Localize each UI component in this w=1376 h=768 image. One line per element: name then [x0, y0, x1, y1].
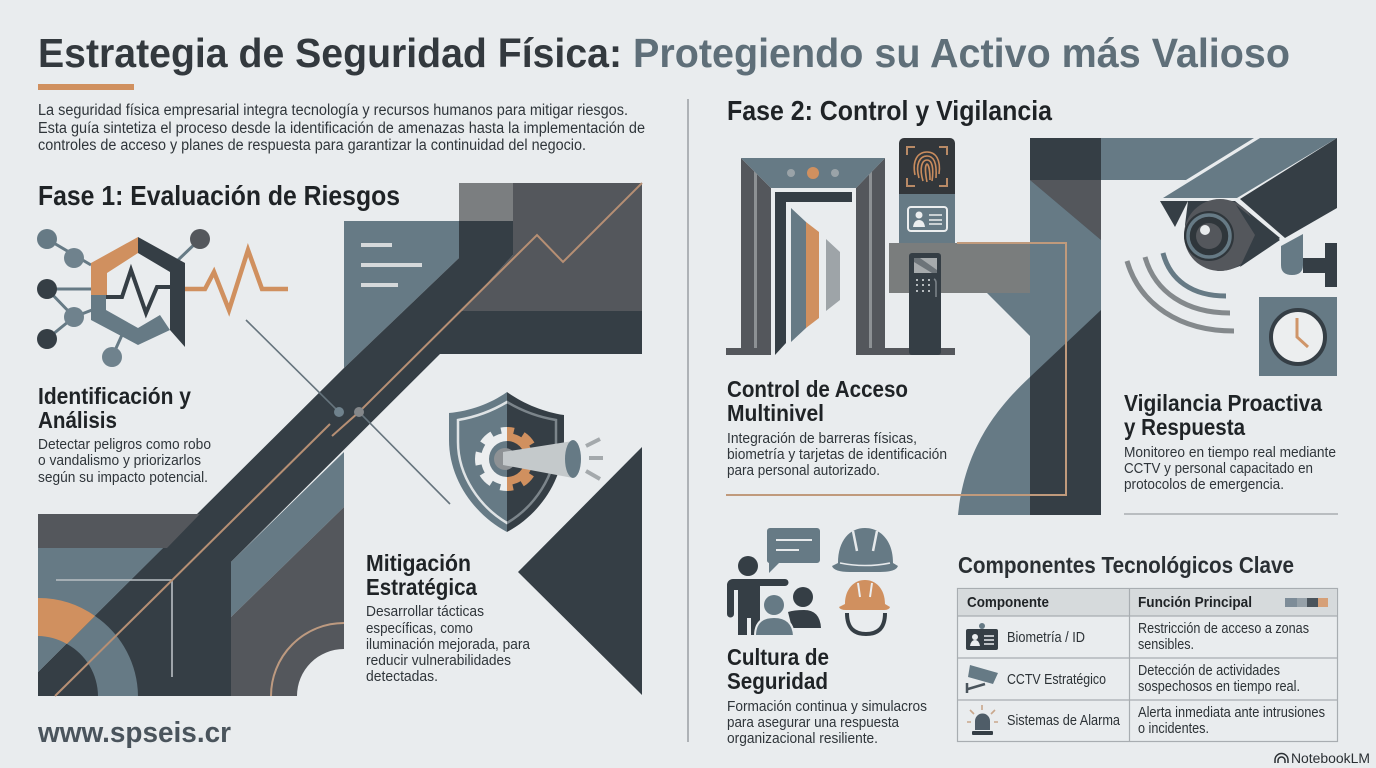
notebooklm watermark: NotebookLM — [1291, 751, 1370, 766]
text block: control de acceso: para personal autorizado. — [727, 462, 880, 479]
text block: cultura de seguridad — [727, 644, 927, 747]
text block: vigilancia proactiva: Vigilancia Proactiva — [1124, 390, 1322, 416]
title: Protegiendo su Activo más Valioso — [633, 30, 1290, 76]
text block: cultura de seguridad: para asegurar una respuesta — [727, 714, 900, 731]
table header — [967, 594, 1328, 611]
icon: shield with gear and megaphone — [449, 392, 603, 532]
text block: control de acceso: Control de Acceso — [727, 376, 908, 402]
table row: biometría: Biometría / ID — [1007, 630, 1085, 646]
text block: cultura de seguridad: organizacional resiliente. — [727, 730, 878, 747]
text block: control de acceso: Multinivel — [727, 400, 824, 426]
table: componentes tecnológicos — [958, 588, 1338, 742]
table row: cctv: sospechosos en tiempo real. — [1138, 679, 1300, 695]
table row: alarma: o incidentes. — [1138, 721, 1209, 737]
text block: identificación y análisis: o vandalismo y priorizarlos — [38, 452, 201, 469]
text block: identificación y análisis — [38, 383, 211, 486]
text block: mitigación estratégica: Estratégica — [366, 574, 477, 600]
text block: control de acceso: Integración de barreras físicas, — [727, 430, 917, 447]
intro text: Esta guía sintetiza el proceso desde la identificación de amenazas hasta la implementación de — [38, 120, 645, 137]
table header: Componente — [967, 594, 1049, 611]
table row: alarma — [1007, 705, 1325, 737]
icon: slate hard hat — [832, 528, 898, 572]
icon: biometric badge — [966, 623, 998, 650]
icon: orange hard hat — [839, 580, 890, 634]
icon: clock — [1259, 297, 1337, 376]
heading: fase 1: Fase 1: Evaluación de Riesgos — [38, 180, 400, 211]
text block: mitigación estratégica: Mitigación — [366, 550, 471, 576]
panel: abstract risk diagram — [38, 183, 642, 696]
table row: cctv: Detección de actividades — [1138, 663, 1280, 679]
icon: risk analysis hexagon network — [37, 229, 288, 367]
icon: security gate — [726, 158, 955, 355]
text block: vigilancia proactiva: y Respuesta — [1124, 414, 1245, 440]
icon: access kiosk — [909, 253, 941, 355]
text block: mitigación estratégica: Desarrollar tácticas — [366, 603, 484, 620]
text block: cultura de seguridad: Seguridad — [727, 668, 828, 694]
table row: cctv: CCTV Estratégico — [1007, 672, 1106, 688]
title — [38, 30, 1290, 76]
intro text — [38, 102, 645, 154]
table row: cctv — [1007, 663, 1300, 695]
text block: mitigación estratégica: reducir vulnerabilidades — [366, 652, 511, 669]
table row: alarma: Sistemas de Alarma — [1007, 713, 1121, 729]
icon: cctv camera — [1160, 138, 1337, 287]
text block: vigilancia proactiva: Monitoreo en tiempo real mediante — [1124, 444, 1336, 461]
panel: abstract architecture backdrop — [726, 138, 1254, 515]
table row: biometría — [1007, 621, 1309, 653]
text block: control de acceso — [727, 376, 947, 479]
icon: signal waves — [1127, 253, 1234, 331]
heading: componentes: Componentes Tecnológicos Clave — [958, 552, 1294, 578]
text block: identificación y análisis: Identificación y — [38, 383, 191, 409]
text block: cultura de seguridad: Cultura de — [727, 644, 829, 670]
icon: alarm beacon — [967, 705, 998, 735]
icon: id card — [899, 194, 955, 243]
text block: vigilancia proactiva — [1124, 390, 1336, 493]
table row: alarma: Alerta inmediata ante intrusiones — [1138, 705, 1325, 721]
text block: mitigación estratégica: iluminación mejorada, para — [366, 636, 531, 653]
table row: biometría: Restricción de acceso a zonas — [1138, 621, 1309, 637]
icon: fingerprint scanner — [899, 138, 955, 194]
text block: control de acceso: biometría y tarjetas de identificación — [727, 446, 947, 463]
intro text: La seguridad física empresarial integra tecnología y recursos humanos para mitigar riesgos. — [38, 102, 628, 119]
text block: vigilancia proactiva: CCTV y personal capacitado en — [1124, 460, 1313, 477]
heading: fase 2: Fase 2: Control y Vigilancia — [727, 95, 1052, 126]
icon: training group — [727, 528, 821, 636]
text block: identificación y análisis: según su impacto potencial. — [38, 469, 208, 486]
text block: mitigación estratégica: específicas, como — [366, 620, 473, 637]
text block: cultura de seguridad: Formación continua y simulacros — [727, 698, 927, 715]
website url: www.spseis.cr — [37, 717, 231, 749]
table row: biometría: sensibles. — [1138, 637, 1194, 653]
table header: Función Principal — [1138, 594, 1252, 611]
text block: vigilancia proactiva: protocolos de emergencia. — [1124, 476, 1284, 493]
text block: identificación y análisis: Análisis — [38, 407, 117, 433]
text block: mitigación estratégica — [366, 550, 531, 685]
text block: mitigación estratégica: detectadas. — [366, 668, 438, 685]
text block: identificación y análisis: Detectar peligros como robo — [38, 436, 211, 453]
icon: small cctv — [967, 665, 998, 693]
title: Estrategia de Seguridad Física: — [38, 30, 622, 76]
title accent bar — [38, 84, 134, 90]
intro text: controles de acceso y planes de respuesta para garantizar la continuidad del negocio. — [38, 137, 586, 154]
